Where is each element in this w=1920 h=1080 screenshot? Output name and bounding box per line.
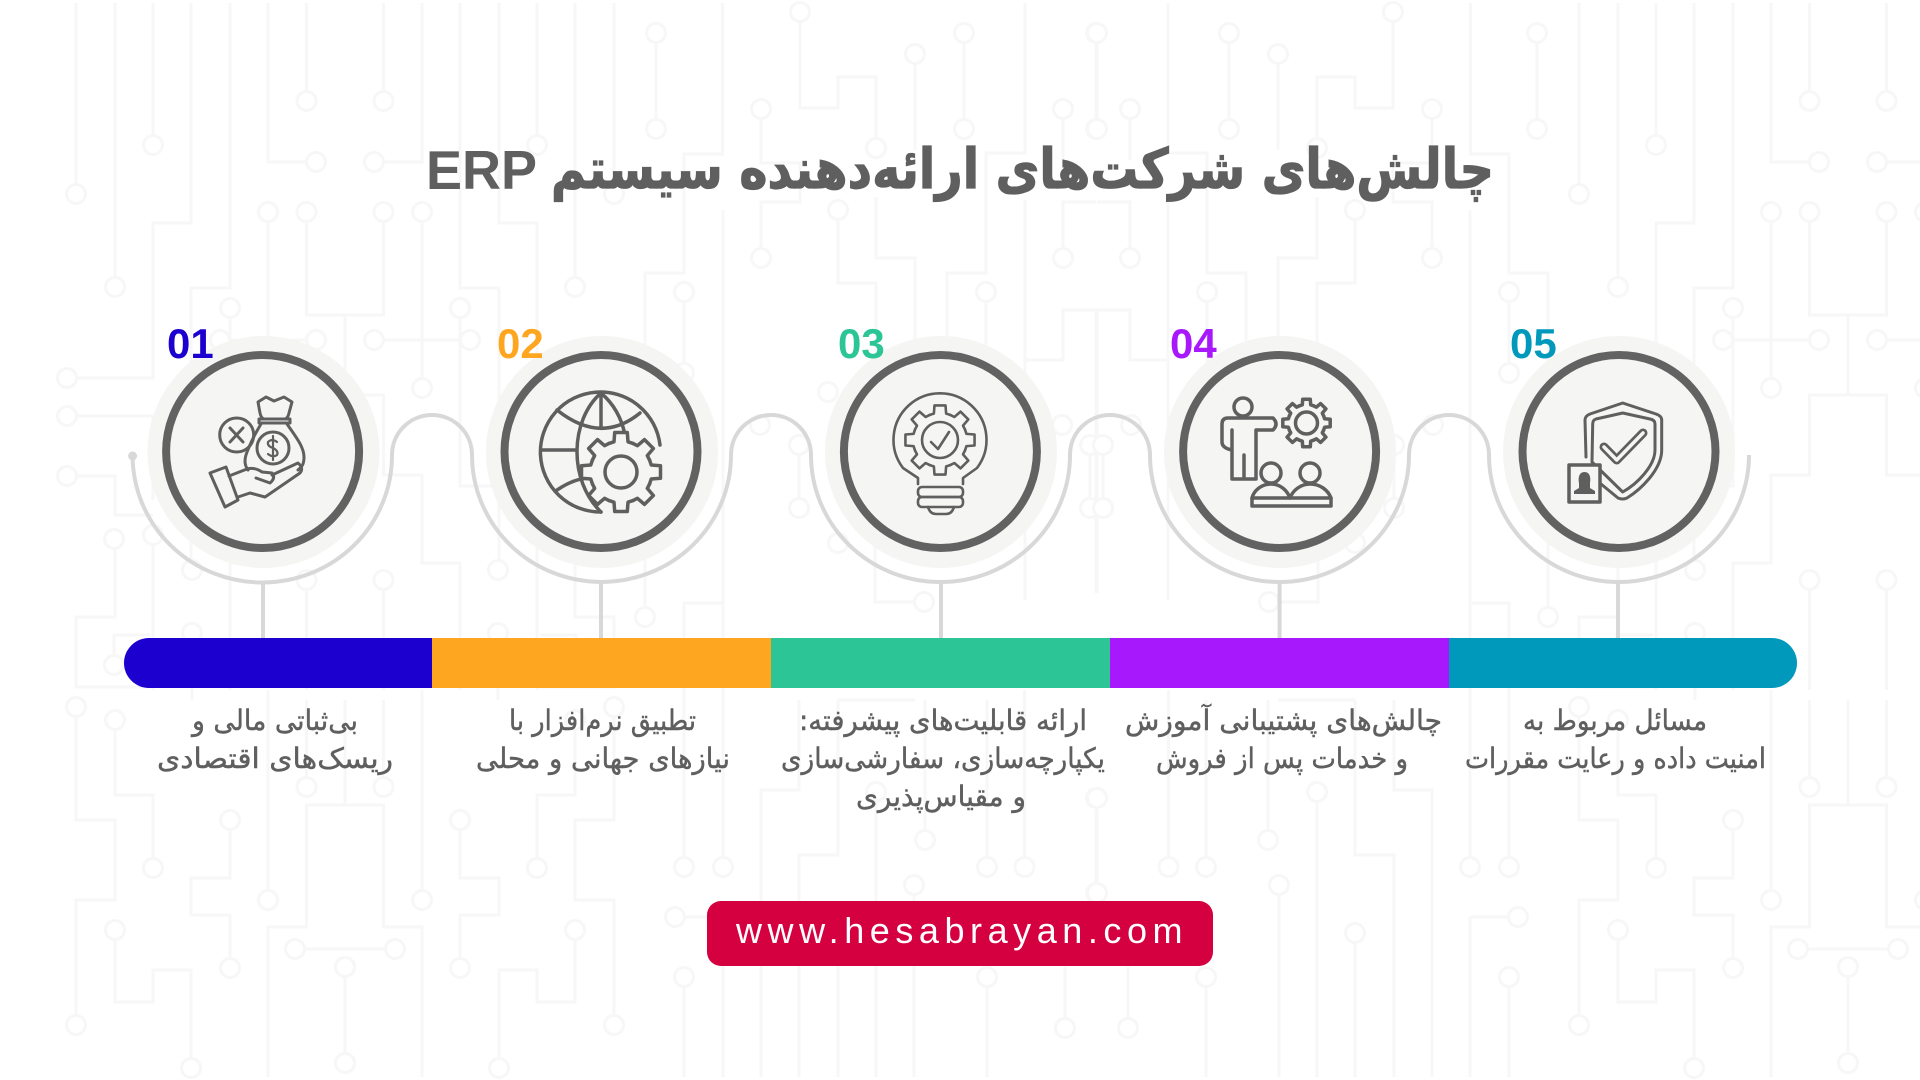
caption 03: یکپارچه‌سازی، سفارشی‌سازی [781, 742, 1105, 775]
website badge: www.hesabrayan.com [735, 910, 1188, 951]
number 05: 05 [1510, 320, 1557, 367]
step 04 [1164, 320, 1396, 568]
title: چالش‌های شرکت‌های ارائه‌دهنده سیستم [551, 137, 1494, 202]
step 01 [148, 320, 380, 568]
number 02: 02 [497, 320, 544, 367]
caption 04 [1125, 704, 1442, 775]
badge 05 [1503, 336, 1735, 568]
icon: money bag on hand [210, 397, 304, 507]
title: ERP [426, 139, 537, 201]
caption 02: نیازهای جهانی و محلی [476, 742, 730, 775]
badge 04 [1164, 336, 1396, 568]
stems to the timeline bar [263, 582, 1618, 640]
caption 03 [781, 704, 1105, 813]
icon: trainer and audience with gear [1222, 398, 1331, 506]
icon: light bulb with gear [893, 393, 987, 514]
website badge [707, 901, 1213, 966]
caption 02: تطبیق نرم‌افزار با [509, 704, 696, 737]
caption 05 [1465, 704, 1766, 775]
number 03: 03 [838, 320, 885, 367]
badge 02 [486, 336, 718, 568]
caption 01 [157, 704, 393, 775]
caption 02 [476, 704, 730, 775]
timeline bar [124, 638, 1797, 688]
step 02 [486, 320, 718, 568]
step 05 [1503, 320, 1735, 568]
caption 01: ریسک‌های اقتصادی [157, 742, 393, 775]
caption 01: بی‌ثباتی مالی و [190, 704, 358, 737]
caption 03: ارائه قابلیت‌های پیشرفته: [799, 704, 1087, 737]
caption 03: و مقیاس‌پذیری [856, 780, 1026, 813]
caption 05: امنیت داده و رعایت مقررات [1465, 742, 1766, 775]
icon: shield with check and id card [1569, 403, 1662, 502]
badge 01 [148, 336, 380, 568]
number 01: 01 [167, 320, 214, 367]
step 03 [825, 320, 1057, 568]
connecting ribbon line [128, 415, 1749, 583]
number 04: 04 [1170, 320, 1217, 367]
caption 04: و خدمات پس از فروش [1156, 742, 1408, 775]
caption 05: مسائل مربوط به [1523, 704, 1707, 737]
badge 03 [825, 336, 1057, 568]
icon: globe with gear [540, 392, 660, 512]
caption 04: چالش‌های پشتیبانی آموزش [1125, 704, 1442, 737]
